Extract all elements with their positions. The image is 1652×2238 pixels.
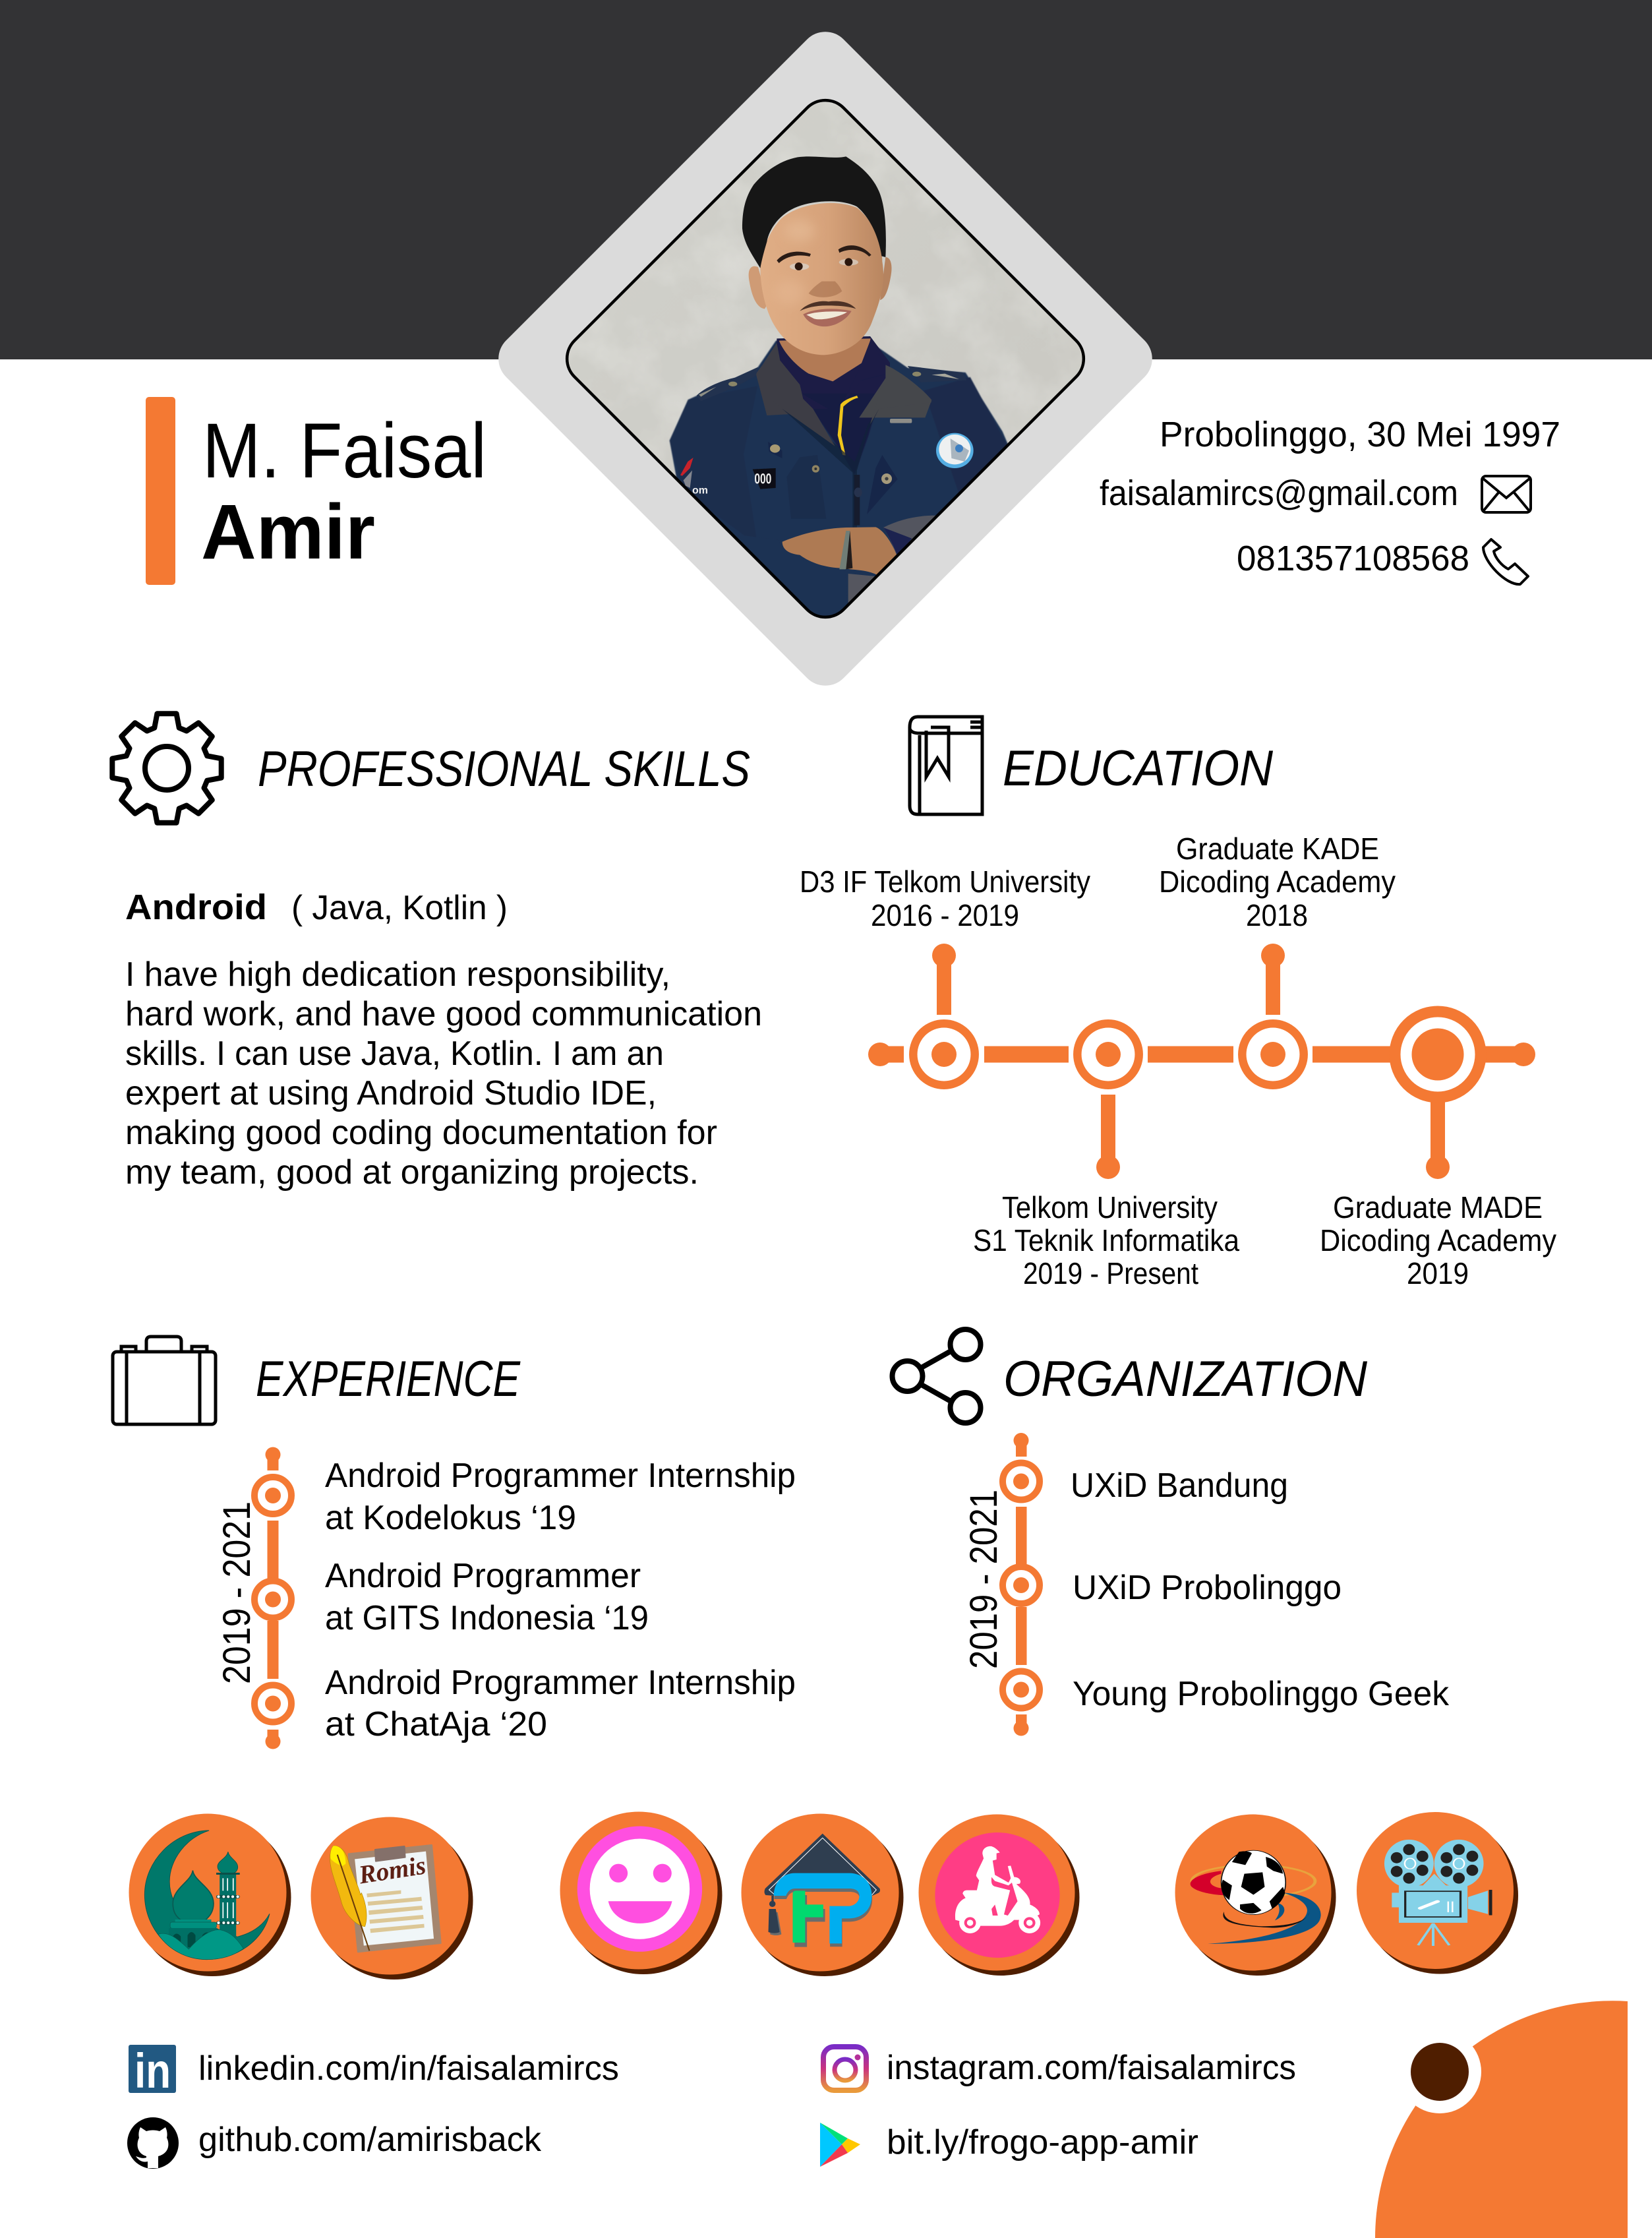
education labels: 2019 — [1407, 1256, 1469, 1290]
organization date range: 2019 - 2021 — [962, 1490, 1005, 1669]
icon: gear — [112, 713, 221, 823]
education labels: 2019 - Present — [1023, 1256, 1198, 1290]
experience timeline — [254, 1447, 291, 1749]
skill title: ( Java, Kotlin ) — [291, 889, 508, 927]
organization timeline — [1003, 1433, 1040, 1736]
portrait diamond frame — [488, 21, 1163, 696]
skill description: my team, good at organizing projects. — [125, 1153, 699, 1192]
heading: professional skills: PROFESSIONAL SKILLS — [258, 741, 750, 797]
icon: linkedin: in — [134, 2043, 171, 2098]
education labels: D3 IF Telkom University — [800, 864, 1090, 899]
link: play store — [820, 2123, 1198, 2167]
skill description: making good coding documentation for — [125, 1114, 717, 1152]
corner decoration — [1375, 2001, 1628, 2238]
icon: play store — [820, 2123, 860, 2167]
organization entries: Young Probolinggo Geek — [1073, 1675, 1450, 1713]
education labels — [800, 832, 1556, 1290]
experience entries: at ChatAja ‘20 — [325, 1705, 547, 1743]
link: instagram: instagram.com/faisalamircs — [887, 2049, 1296, 2087]
education labels: Dicoding Academy — [1159, 864, 1396, 899]
organization entries — [1071, 1467, 1450, 1713]
education timeline — [868, 944, 1535, 1179]
education labels: 2016 - 2019 — [871, 898, 1019, 932]
experience entries: Android Programmer Internship — [325, 1457, 796, 1495]
icon: briefcase — [113, 1337, 216, 1424]
name: M. Faisal — [202, 408, 487, 495]
badge: film projector — [1357, 1812, 1518, 1974]
portrait photo — [568, 102, 1082, 616]
experience date range: 2019 - 2021 — [216, 1501, 258, 1684]
badge: scooter — [919, 1815, 1080, 1976]
icon: book — [910, 717, 982, 814]
organization entries: UXiD Probolinggo — [1073, 1569, 1342, 1607]
panel: education — [800, 717, 1556, 1290]
badge: smiley — [560, 1812, 723, 1974]
name: Amir — [201, 489, 375, 576]
panel: experience — [113, 1337, 796, 1749]
skill description: I have high dedication responsibility, — [125, 955, 670, 994]
education labels: S1 Teknik Informatika — [973, 1223, 1239, 1257]
jacket lower details: om — [692, 485, 708, 496]
education labels: Dicoding Academy — [1320, 1223, 1556, 1257]
experience entries: Android Programmer — [325, 1557, 641, 1595]
skill description: skills. I can use Java, Kotlin. I am an — [125, 1035, 664, 1073]
badge: mosque — [129, 1813, 291, 1976]
icon: share — [893, 1329, 981, 1423]
badge: TP graduation cap — [741, 1813, 903, 1976]
badge: soccer — [1175, 1815, 1336, 1976]
education labels: Graduate KADE — [1176, 832, 1379, 866]
header band — [0, 0, 1652, 359]
jacket — [669, 340, 1009, 604]
education labels: Graduate MADE — [1333, 1190, 1543, 1225]
contact info: Probolinggo, 30 Mei 1997 — [1160, 415, 1560, 454]
organization entries: UXiD Bandung — [1071, 1467, 1288, 1505]
name — [201, 408, 487, 576]
heading: education: EDUCATION — [1003, 741, 1273, 797]
icon: envelope — [1482, 476, 1531, 512]
badge: romis clipboard: Romis — [356, 1850, 428, 1890]
shirt — [802, 393, 875, 462]
skill title: Android — [125, 888, 267, 927]
link: linkedin: linkedin.com/in/faisalamircs — [198, 2049, 619, 2088]
heading: organization: ORGANIZATION — [1003, 1351, 1367, 1407]
experience entries: at Kodelokus ‘19 — [325, 1499, 576, 1537]
icon: github — [127, 2117, 179, 2169]
contact info: 081357108568 — [1237, 539, 1469, 578]
link: github — [127, 2117, 542, 2169]
head and collar — [697, 156, 967, 417]
experience entries: Android Programmer Internship — [325, 1664, 796, 1702]
skill description: expert at using Android Studio IDE, — [125, 1074, 657, 1112]
jacket lower details — [680, 396, 974, 622]
experience entries: at GITS Indonesia ‘19 — [325, 1599, 649, 1637]
education labels: Telkom University — [1002, 1190, 1218, 1225]
skill description: hard work, and have good communication — [125, 995, 762, 1033]
skill title — [125, 888, 508, 927]
icon: phone — [1483, 539, 1528, 584]
panel: professional skills — [112, 713, 762, 1192]
icon: instagram — [823, 2047, 866, 2090]
skill description — [125, 955, 762, 1192]
name accent bar — [146, 397, 175, 585]
badge: romis clipboard — [311, 1817, 473, 1980]
contact info: faisalamircs@gmail.com — [1100, 473, 1458, 513]
panel: organization — [893, 1329, 1450, 1736]
heading: experience: EXPERIENCE — [256, 1351, 521, 1407]
jacket lower details: 000 — [754, 470, 771, 487]
experience entries — [325, 1457, 796, 1743]
link: play store: bit.ly/frogo-app-amir — [887, 2123, 1198, 2162]
link: github: github.com/amirisback — [198, 2121, 542, 2159]
education labels: 2018 — [1246, 898, 1308, 932]
link: linkedin — [129, 2043, 619, 2098]
contact info — [1100, 415, 1560, 584]
